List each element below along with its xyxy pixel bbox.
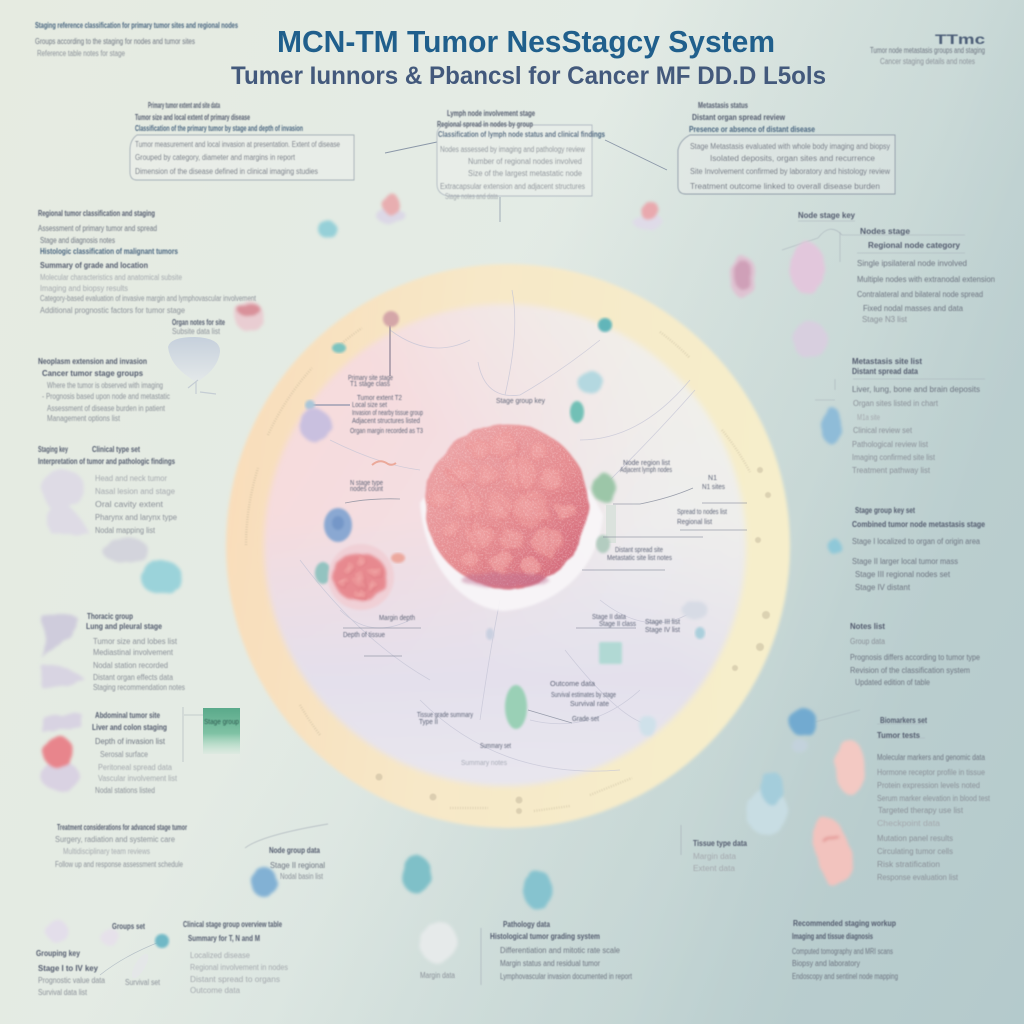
text block: left fourth: Nodal station recorded	[93, 661, 168, 670]
text block: bottom right: Computed tomography and MRI scans	[792, 947, 893, 956]
inner labels: Distant spread site	[615, 547, 663, 554]
label rule lines	[343, 488, 747, 723]
text block: bottom left: Summary for T, N and M	[188, 934, 260, 943]
panel: top right callout: Metastasis status	[698, 101, 748, 110]
text block: right fifth: Serum marker elevation in blood test	[877, 794, 991, 803]
inner disc	[264, 304, 746, 786]
text block: top right note: TTmc	[935, 31, 985, 47]
text block: bottom center: Differentiation and mitotic rate scale	[500, 946, 621, 955]
text block: left third: Head and neck tumor	[95, 474, 167, 483]
icon: pink purple organ	[730, 256, 756, 298]
text block: lower left	[55, 823, 187, 869]
icon: pink brown node	[383, 311, 399, 327]
text block: bottom center: Margin data	[420, 971, 455, 980]
icon: grey green node	[596, 505, 616, 553]
icon: lung upper	[42, 613, 78, 660]
inner labels: Node region list	[623, 460, 670, 467]
inner labels: Invasion of nearby tissue group	[352, 410, 423, 417]
inner labels: Tumor extent T2	[357, 395, 402, 402]
panel: top center callout: Classification of lymph node status and clinical findings	[438, 130, 605, 139]
icon: pale grey node right	[682, 601, 708, 619]
callout line: top left vertical	[389, 325, 391, 376]
text block: bottom far left: Stage I to IV key	[38, 964, 99, 973]
icon: grey bladder balloon	[168, 337, 220, 394]
icon: pale purple organ	[793, 321, 827, 359]
panel: top right callout: Site Involvement confirmed by laboratory and histology review	[690, 167, 890, 176]
text block: left second: - Prognosis based upon node and metastatic	[42, 392, 170, 401]
icon: blue organ right	[822, 407, 842, 445]
panel: top left callout: Dimension of the disease defined in clinical imaging studies	[135, 167, 318, 176]
icon: teal small node	[315, 562, 331, 584]
inner labels: Summary notes	[461, 760, 507, 767]
text block: lower left: Surgery, radiation and systemic care	[55, 835, 176, 844]
text block: left second	[38, 357, 170, 423]
text block: lower left: Treatment considerations for advanced stage tumor	[57, 823, 187, 832]
arrow: top center to right	[605, 140, 667, 170]
icon: blue tumor node	[324, 508, 352, 542]
icon: teal organ top left	[319, 221, 337, 239]
icon: blue dot right	[828, 540, 842, 554]
text block: left upper: Molecular characteristics and anatomical subsite	[40, 273, 182, 282]
text block: left fifth: Vascular involvement list	[98, 774, 178, 783]
text block: left second: Assessment of disease burden in patient	[47, 404, 166, 413]
text block: lower left: Multidisciplinary team reviews	[63, 847, 150, 856]
icon: pale organ bottom center	[419, 921, 457, 963]
text block: left upper: Category-based evaluation of invasive margin and lymphovascular involvement	[40, 294, 257, 303]
inner labels: T1 stage class	[350, 381, 390, 388]
text block: right upper: Multiple nodes with extranodal extension	[857, 275, 995, 284]
panel: top right callout	[678, 101, 895, 194]
text block: blue organ label: Stage II regional	[270, 861, 325, 870]
inner labels: Grade set	[572, 716, 599, 723]
text block: left upper: Histologic classification of malignant tumors	[40, 247, 178, 256]
icon: pale circle bottom left second	[101, 928, 119, 946]
text block: right fifth: Hormone receptor profile in tissue	[877, 768, 985, 777]
inner labels: Survival estimates by stage	[551, 692, 616, 699]
arrow: top center down	[499, 197, 501, 222]
panel: top center callout: Stage notes and data	[445, 192, 498, 201]
inner labels: Organ margin recorded as T3	[350, 428, 423, 435]
text block: left fourth: Lung and pleural stage	[86, 622, 162, 631]
panel: top center callout: Regional spread in nodes by group	[437, 120, 533, 129]
panel: top right callout: Presence or absence of distant disease	[689, 125, 815, 134]
icon: head profile	[42, 471, 90, 534]
text block: bottom center: Margin status and residual tumor	[500, 959, 600, 968]
text block: small label near blue dot: Groups set	[112, 922, 145, 931]
text block: left second: Where the tumor is observed with imaging	[47, 381, 163, 390]
icon: teal organ bottom	[402, 856, 432, 894]
icon: small teal node right	[598, 318, 612, 332]
inner labels: nodes count	[350, 486, 383, 493]
ring dotted arcs	[246, 328, 750, 811]
icon: purple node with connector	[299, 400, 350, 441]
icon: teal organ bottom right	[524, 870, 552, 910]
text block: right second: Clinical review set	[853, 426, 913, 435]
icon: main tumor	[425, 424, 589, 588]
text block: right second: Treatment pathway list	[852, 466, 931, 475]
icon: small teal node left	[332, 343, 346, 353]
text block: right second: Imaging confirmed site list	[852, 453, 936, 462]
inner labels	[343, 375, 727, 767]
icon: blue organ	[251, 867, 277, 897]
text block: left fourth: Staging recommendation notes	[93, 683, 185, 692]
subtitle: Tumer Iunnors & Pbancsl for Cancer MF DD.D L5ols	[231, 62, 826, 90]
icon: pale blue organ	[746, 771, 788, 835]
icon: blue organ lower right	[789, 708, 817, 753]
text block: bottom far left	[36, 949, 105, 997]
text block: right fourth: Updated edition of table	[855, 678, 930, 687]
panel: top left callout	[130, 101, 354, 180]
text block: left fourth: Tumor size and lobes list	[93, 637, 178, 646]
text block: bottom center: Pathology data	[503, 920, 550, 929]
text block: right third: Stage II larger local tumor mass	[852, 557, 958, 566]
text block: left upper: Additional prognostic factors for tumor stage	[40, 306, 186, 315]
inner labels: Adjacent structures listed	[352, 418, 420, 425]
text block: right upper: Regional node category	[868, 241, 961, 250]
panel: top center callout: Nodes assessed by imaging and pathology review	[440, 145, 585, 154]
text block: label under blue dot: Survival set	[125, 978, 161, 987]
text block: bottom center	[420, 920, 633, 985]
panel: top left callout: Primary tumor extent and site data	[148, 101, 220, 110]
text block: bottom center: Histological tumor grading system	[490, 932, 600, 941]
text block: right second: Distant spread data	[852, 367, 918, 376]
panel: top center callout: Number of regional nodes involved	[468, 157, 582, 166]
text block: left fourth: Mediastinal involvement	[93, 648, 174, 657]
icon: teal node	[570, 401, 584, 423]
inner labels: Type II	[419, 719, 438, 726]
text block: bottom right: Imaging and tissue diagnosis	[792, 932, 873, 941]
text block: right fifth: Checkpoint data	[877, 819, 941, 828]
text block: bottom left: Regional involvement in nodes	[190, 963, 288, 972]
text block: right fifth: Molecular markers and genomic data	[877, 753, 985, 762]
text block: bottom left: Outcome data	[190, 986, 241, 995]
text block: right second: M1a site	[857, 413, 880, 422]
text block: right upper: Fixed nodal masses and data	[863, 304, 964, 313]
icon: lung lower	[41, 665, 84, 688]
text block: left third: Interpretation of tumor and pathologic findings	[38, 457, 175, 466]
text block: bottom far left: Survival data list	[38, 988, 88, 997]
text block: bottom left: Localized disease	[190, 951, 251, 960]
text block: bottom right	[792, 919, 898, 981]
text block: right second: Organ sites listed in chart	[853, 399, 939, 408]
text block: bottom left	[183, 920, 288, 995]
inner labels: Metastatic site list notes	[607, 555, 672, 562]
panel: top left callout: Grouped by category, diameter and margins in report	[135, 153, 296, 162]
text block: left upper: Regional tumor classification and staging	[38, 209, 155, 218]
inner labels: Stage group key	[496, 398, 545, 405]
inner labels: N1 sites	[702, 484, 725, 491]
text block: left fifth: Nodal stations listed	[95, 786, 155, 795]
text block: top right note	[870, 31, 985, 66]
text block: left fourth: Distant organ effects data	[93, 673, 173, 682]
arrow: top left callout	[385, 142, 437, 153]
text block: left upper	[38, 209, 257, 336]
text block: right third: Stage IV distant	[855, 583, 911, 592]
text block: top left note: Staging reference classification for primary tumor sites and regional nodes	[35, 21, 238, 30]
text block: right fifth: Tumor tests	[877, 731, 921, 740]
inner labels: Local size set	[352, 402, 387, 409]
text block: left third: Oral cavity extent	[95, 500, 164, 509]
text block: bottom right: Endoscopy and sentinel node mapping	[792, 972, 898, 981]
icon: red tissue top left	[234, 301, 264, 331]
icon: pale blue node bottom right	[639, 716, 657, 736]
icon: blue dot with connectors	[100, 934, 169, 981]
text block: left fifth: Peritoneal spread data	[98, 763, 173, 772]
text block: right fourth: Prognosis differs according to tumor type	[850, 653, 980, 662]
text block: left fifth: Depth of invasion list	[95, 737, 166, 746]
text block: left upper: Subsite data list	[172, 327, 221, 336]
icon: green node right of tumor	[592, 474, 616, 502]
icon: teal organ	[140, 560, 182, 594]
connective vessel lines	[300, 290, 695, 771]
text block: right third: Stage group key set	[855, 506, 915, 515]
text block: right fourth	[850, 622, 980, 687]
text block: bottom far left: Prognostic value data	[38, 976, 105, 985]
icon: peach organ	[835, 740, 865, 794]
text block: top right note: Cancer staging details and notes	[880, 57, 975, 66]
panel: top left callout: Classification of the primary tumor by stage and depth of invasion	[135, 124, 303, 133]
text block: left upper: Stage and diagnosis notes	[40, 236, 115, 245]
text block: left fifth: Serosal surface	[100, 750, 148, 759]
inner labels: Summary set	[480, 743, 511, 750]
icon: small blue drop	[695, 627, 705, 639]
text block: right third: Stage I localized to organ of origin area	[852, 537, 981, 546]
inner labels: Stage II class	[599, 621, 636, 628]
text block: top left note	[35, 21, 238, 58]
text block: right fifth: Circulating tumor cells	[877, 847, 953, 856]
text block: bottom right: Recommended staging workup	[793, 919, 896, 928]
panel: top right callout: Isolated deposits, organ sites and recurrence	[710, 154, 876, 163]
text block: right fourth: Revision of the classification system	[850, 666, 970, 675]
text block: right fifth: Mutation panel results	[877, 834, 953, 843]
title: MCN-TM Tumor NesStagcy System	[277, 24, 775, 59]
panel: top center callout: Size of the largest metastatic node	[468, 169, 583, 178]
text block: right fifth: Response evaluation list	[877, 873, 959, 882]
text block: right upper	[782, 211, 995, 324]
text block: right second: Metastasis site list	[852, 357, 922, 366]
text block: left second: Management options list	[47, 414, 121, 423]
icon: green legend box with connector: Stage group	[204, 719, 239, 726]
inner labels: Stage III list	[645, 619, 680, 626]
text block: bottom left: Clinical stage group overview table	[183, 920, 282, 929]
text block: bottom right: Biopsy and laboratory	[792, 959, 860, 968]
panel: top left callout: Tumor measurement and local invasion at presentation. Extent of disease	[135, 140, 340, 149]
text block: lower right label	[681, 825, 747, 873]
text block: right second: Pathological review list	[852, 440, 929, 449]
inner labels: Stage IV list	[645, 627, 680, 634]
chart: central staging disc	[226, 264, 790, 828]
icon: white cup behind tumor	[420, 490, 603, 611]
icon: teal square node	[599, 642, 622, 664]
icon: pink organ top right	[633, 202, 663, 230]
icon: pale circle bottom left	[46, 920, 68, 942]
text block: right second	[815, 357, 985, 475]
text block: left third: Pharynx and larynx type	[95, 513, 178, 522]
inner labels: Survival rate	[570, 701, 609, 708]
text block: right fourth: Notes list	[850, 622, 885, 631]
text block: left second: Neoplasm extension and invasion	[38, 357, 147, 366]
panel: top right callout: Distant organ spread review	[692, 113, 786, 122]
text block: left fourth: Thoracic group	[87, 612, 133, 621]
text block: lower left: Follow up and response assessment schedule	[55, 860, 183, 869]
ring tiny icons	[376, 467, 771, 814]
text block: left fifth: Abdominal tumor site	[95, 711, 160, 720]
inner labels: Adjacent lymph nodes	[620, 467, 672, 474]
inner labels: N stage type	[350, 480, 383, 487]
text block: right upper: Node stage key	[798, 211, 856, 220]
panel: top right callout: Treatment outcome linked to overall disease burden	[690, 182, 880, 191]
icon: peach squiggle	[372, 461, 396, 465]
icon: green node bottom	[505, 685, 527, 729]
inner labels: Margin depth	[379, 615, 415, 622]
panel: top center callout: Extracapsular extension and adjacent structures	[440, 182, 585, 191]
icon: pink red organ	[812, 818, 853, 885]
text block: right third	[852, 506, 985, 592]
text block: bottom center: Lymphovascular invasion documented in report	[500, 972, 633, 981]
icon: pale teal node	[577, 371, 603, 393]
panel: top right callout: Stage Metastasis evaluated with whole body imaging and biopsy	[690, 142, 890, 151]
text block: left third: Staging key	[38, 445, 68, 454]
text block: left third: Nodal mapping list	[95, 526, 156, 535]
icon: small tumor	[328, 544, 405, 610]
icon: red organ	[41, 714, 82, 791]
text block: bottom far left: Grouping key	[36, 949, 80, 958]
text block: right upper: Contralateral and bilateral node spread	[857, 290, 983, 299]
text block: right fifth: Protein expression levels noted	[877, 781, 980, 790]
inner labels: Outcome data	[550, 681, 595, 688]
icon: small capsule below tumor	[486, 628, 494, 640]
inner labels: Primary site stage	[348, 375, 393, 382]
inner labels: Spread to nodes list	[677, 509, 727, 516]
text block: left fifth: Liver and colon staging	[92, 723, 167, 732]
text block: top left note: Reference table notes for stage	[37, 49, 125, 58]
inner labels: Stage II data	[592, 614, 626, 621]
panel: top center callout	[437, 109, 605, 201]
inner labels: Depth of tissue	[343, 632, 385, 639]
text block: right fifth: Biomarkers set	[880, 716, 927, 725]
text block: right fifth: Targeted therapy use list	[878, 806, 964, 815]
inner labels: N1	[708, 475, 717, 482]
text block: lower right label: Extent data	[693, 864, 736, 873]
icon: grey organ	[102, 537, 148, 563]
text block: left second: Cancer tumor stage groups	[42, 369, 144, 378]
text block: left fourth	[86, 612, 185, 692]
text block: right fourth: Group data	[850, 637, 885, 646]
text block: right third: Combined tumor node metastasis stage	[852, 520, 985, 529]
panel: top center callout: Lymph node involvement stage	[447, 109, 535, 118]
text block: left upper: Summary of grade and location	[40, 261, 148, 270]
text block: left upper: Organ notes for site	[172, 318, 225, 327]
text block: left upper: Assessment of primary tumor and spread	[38, 224, 157, 233]
text block: left third: Clinical type set	[92, 445, 140, 454]
outer yellow ring	[226, 264, 790, 828]
text block: bottom left: Distant spread to organs	[190, 975, 280, 984]
icon: pink organ top	[376, 193, 406, 223]
text block: right upper: Single ipsilateral node involved	[857, 259, 967, 268]
text block: top left note: Groups according to the staging for nodes and tumor sites	[35, 37, 195, 46]
text block: blue organ label: Node group data	[269, 846, 320, 855]
text block: right third: Stage III regional nodes set	[855, 570, 951, 579]
text block: right fifth	[815, 710, 991, 882]
text block: left third	[38, 445, 178, 535]
text block: right upper: Stage N3 list	[862, 315, 908, 324]
text block: right upper: Nodes stage	[860, 227, 911, 236]
text block: left upper: Imaging and biopsy results	[40, 284, 128, 293]
panel: top left callout: Tumor size and local extent of primary disease	[135, 113, 250, 122]
text block: left fifth	[92, 711, 178, 795]
inner labels: Regional list	[677, 519, 712, 526]
text block: right fifth: Risk stratification	[877, 860, 940, 869]
text block: lower right label: Tissue type data	[693, 839, 747, 848]
icon: pink organ	[790, 242, 824, 294]
inner labels: Tissue grade summary	[417, 712, 473, 719]
text block: right second: Liver, lung, bone and brain deposits	[852, 385, 980, 394]
text block: lower right label: Margin data	[693, 852, 737, 861]
text block: top right note: Tumor node metastasis groups and staging	[870, 46, 985, 55]
icon: green legend box with connector	[183, 707, 240, 762]
text block: left third: Nasal lesion and stage	[95, 487, 176, 496]
text block: blue organ label: Nodal basin list	[280, 872, 324, 881]
text block: blue organ label	[245, 824, 328, 881]
